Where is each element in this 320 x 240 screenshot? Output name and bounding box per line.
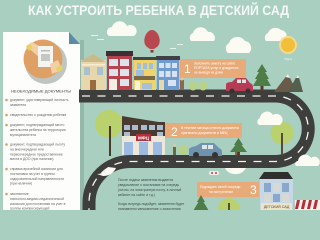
building: cream house: [80, 54, 106, 90]
banner: step 2: [165, 123, 242, 139]
figures and bush on second street: [173, 144, 238, 155]
banner: step 3: 3: [250, 183, 257, 197]
document list: заявителя: [10, 103, 26, 107]
text block: after application: (лично, на электронную почту, в личный: [118, 188, 181, 192]
document list: справка врачебной комиссии для: [10, 167, 63, 171]
icon: mountains: [274, 74, 303, 92]
icon: fir tree: [253, 64, 271, 91]
document list: на внеочередное или: [10, 148, 44, 152]
banner: step 1: Заполнить анкету на сайте: [194, 62, 235, 66]
sign: kindergarten: ДЕТСКИЙ САД: [264, 205, 290, 209]
document list: документ, удостоверяющий личность: [10, 98, 69, 102]
banner: step 3: [197, 182, 259, 197]
document list: свидетельство о рождении ребенка: [10, 113, 66, 117]
document list: муниципалитета: [10, 133, 36, 137]
text block: after application: Когда очередь подойдет, заявителю будет: [118, 202, 185, 206]
icon: red car: [226, 78, 253, 94]
awning: [295, 200, 320, 210]
document list: психолого-медико-педагогической: [10, 197, 64, 201]
banner: step 1: [180, 59, 246, 78]
document list: комиссии для постановки на учет в: [10, 202, 66, 206]
document list: заключение: [10, 192, 29, 196]
banner: step 1: ПОРТАЛА услуг и дождаться: [194, 66, 239, 70]
document list: постановки на учет в группы: [10, 172, 55, 176]
document list: [5, 98, 69, 211]
clouds and sky: [91, 21, 287, 53]
document list: первоочередное предоставление: [10, 152, 63, 156]
figures and bushes on street: [180, 78, 247, 90]
document list: жительства ребенка на территории: [10, 128, 66, 132]
text block: after application: [118, 178, 185, 211]
panel: required documents: [3, 32, 84, 211]
title: КАК УСТРОИТЬ РЕБЕНКА В ДЕТСКИЙ САД: [28, 3, 289, 18]
banner: step 3: Подождать своей очереди: [200, 185, 241, 189]
document list: места в ДОО (при наличии): [10, 157, 54, 161]
icon: hot air balloon: [144, 30, 160, 52]
document list: оздоровительной направленности: [10, 177, 64, 181]
banner: step 3: на поступление: [209, 190, 233, 194]
icon: blue car: [189, 143, 222, 158]
document list: документ, подтверждающий место: [10, 123, 65, 127]
icon: sun: [279, 36, 297, 61]
banner: step 2: 2: [171, 125, 178, 139]
road: [79, 96, 308, 212]
icon: hands passing document: [24, 40, 67, 84]
icon: fir tree bottom: [193, 195, 209, 211]
icon: sun: Порта: [284, 57, 292, 61]
banner: step 1: 1: [184, 62, 191, 76]
text block: after application: После подачи заявления выдается: [118, 178, 173, 182]
icon: green tree left: [95, 110, 123, 156]
text block: after application: уведомление о постановке на очередь: [118, 183, 179, 187]
building: kindergarten: [259, 172, 293, 210]
document list: (при наличии): [10, 182, 32, 186]
banner: step 2: оригиналы документов в МФЦ: [181, 131, 228, 135]
icon: small plane: [209, 171, 219, 175]
sign: MFC: МФЦ: [138, 136, 150, 140]
building: MFC: [122, 116, 165, 155]
icon: fir tree second street: [230, 138, 247, 156]
building: blue house: [156, 56, 180, 90]
banner: step 1: не выходя из дома: [194, 70, 223, 74]
icon: folded corner: [69, 32, 80, 44]
heading: documents: НЕОБХОДИМЫЕ ДОКУМЕНТЫ: [11, 88, 72, 94]
building: yellow house: [133, 57, 156, 90]
text block: after application: кабинет на сайте и т.д.): [118, 193, 155, 197]
icon: green tree bottom: [218, 198, 240, 220]
clouds near road: [97, 112, 320, 176]
icon: green tree in curve: [270, 122, 294, 155]
building: red house: [106, 51, 133, 90]
document list: документ, подтверждающий льготу: [10, 143, 65, 147]
banner: step 2: В течение месяца отнести документы: [181, 126, 240, 130]
